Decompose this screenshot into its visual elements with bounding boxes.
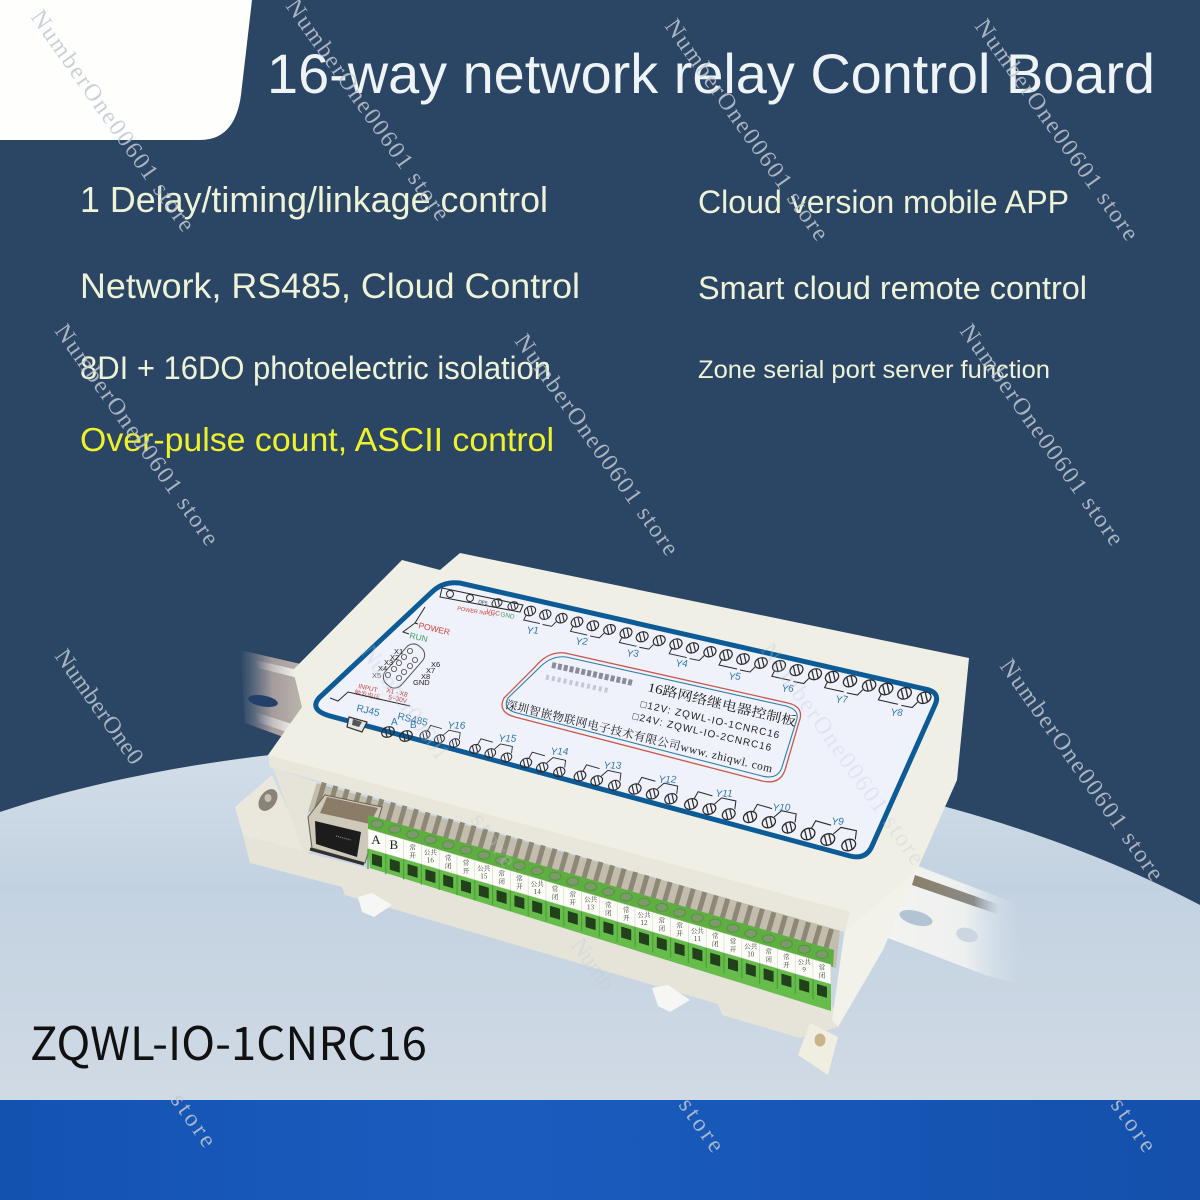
terminal column labels: 常 — [498, 868, 505, 878]
terminal column labels: 常 — [623, 905, 630, 914]
terminal column labels: 公共 — [531, 879, 544, 888]
db9 pin names — [372, 647, 440, 687]
terminal column A — [368, 820, 386, 869]
terminal column labels: 13 — [587, 903, 595, 912]
terminal column labels — [404, 830, 831, 999]
terminal column labels: 闭 — [659, 923, 666, 932]
db9 pin names: X6 — [431, 660, 440, 669]
top relay names: Y5 — [727, 671, 742, 683]
terminal column labels: 常 — [445, 853, 452, 862]
bottom relay names: Y13 — [602, 760, 623, 772]
run indicator label: RUN — [409, 630, 429, 644]
terminal column labels: 16 — [427, 856, 434, 865]
store watermarks: NumberOne00601 store — [25, 5, 199, 237]
terminal column labels: 闭 — [498, 876, 505, 886]
db9 pin names: X8 — [421, 672, 430, 681]
input trigger note: X1 - X8 — [386, 687, 409, 699]
model 24v line: □24V: ZQWL-IO-2CNRC16 — [631, 711, 773, 754]
device: din rail relay controller — [235, 553, 969, 1075]
terminal column labels: 闭 — [765, 955, 772, 964]
terminal column labels: 闭 — [552, 892, 559, 901]
power connector marking: DF5 — [478, 599, 488, 607]
db9 pin names: X5 — [372, 671, 381, 680]
terminal column labels: 10 — [747, 950, 755, 958]
bottom relay names: Y12 — [657, 774, 678, 786]
terminal column B — [386, 825, 404, 874]
gnd caption: GND — [500, 611, 515, 621]
lid front lip — [268, 755, 850, 932]
terminal column labels: 常 — [819, 962, 826, 971]
mounting screw — [255, 786, 281, 814]
terminal column labels: 公共 — [691, 926, 704, 935]
input trigger note: 触发电压 — [354, 687, 381, 702]
background: light curved floor — [0, 744, 1200, 1100]
input note bracket — [330, 692, 410, 706]
terminal column labels: 常 — [605, 900, 612, 909]
store watermarks: NumberOne00601 store — [954, 319, 1128, 551]
terminal column labels: 闭 — [819, 970, 826, 979]
terminal column labels: 9 — [802, 965, 806, 974]
terminal column labels: 11 — [694, 934, 701, 943]
terminal column labels: 常 — [765, 947, 772, 956]
bottom blue band — [0, 1100, 1200, 1200]
feature: serial port server: Zone serial port server function — [698, 356, 1050, 384]
feature: remote control: Smart cloud remote control — [698, 270, 1087, 306]
terminal column labels: 公共 — [744, 942, 758, 950]
terminal column labels: 开 — [730, 944, 737, 953]
terminal column B: B — [389, 837, 398, 852]
top relay names — [525, 625, 904, 719]
terminal column labels: 闭 — [605, 908, 612, 917]
terminal column labels: 12 — [640, 918, 648, 927]
terminal front face — [368, 848, 831, 1011]
terminal column labels: 公共 — [584, 895, 598, 904]
terminal column labels: 常 — [570, 889, 577, 898]
terminal column labels: 公共 — [477, 863, 491, 872]
feature: cloud app: Cloud version mobile APP — [698, 184, 1069, 220]
left mounting block — [235, 775, 308, 853]
store watermarks: NumberOne0 — [49, 644, 148, 770]
terminal column labels: 常 — [409, 842, 416, 851]
rj45 label: RJ45 — [355, 703, 381, 719]
ribbed cavity — [305, 780, 840, 968]
db9 pin names: X3 — [384, 658, 393, 667]
store watermarks: store — [165, 1088, 221, 1152]
store watermarks: NumberOne00601 store — [280, 0, 454, 226]
blurred logo text — [552, 665, 633, 683]
db9 pin names: X1 — [394, 647, 403, 656]
terminal top face — [368, 815, 834, 967]
db9 pin names: X2 — [390, 653, 399, 662]
rs485 screws — [380, 725, 414, 743]
terminal column labels: 公共 — [424, 848, 437, 857]
right side wall — [832, 868, 917, 1027]
top relay names: Y6 — [780, 683, 795, 695]
db9 input connector — [380, 640, 428, 692]
top relay names: Y1 — [525, 625, 540, 637]
terminal column labels: 公共 — [798, 957, 811, 966]
mounting ear with hole — [798, 1023, 838, 1075]
store watermarks: NumberOne00601 store — [509, 329, 683, 561]
terminal column labels: 常 — [712, 931, 719, 940]
terminal column labels: 开 — [783, 960, 790, 969]
a terminal label: A — [391, 717, 398, 728]
power indicator label: POWER — [418, 620, 451, 637]
indicator bracket — [403, 607, 425, 634]
model number: ZQWL-IO-1CNRC16 — [30, 1008, 427, 1074]
company and website line: 深圳智嵌物联网电子技术有限公司www. zhiqwl. com — [504, 697, 774, 775]
feature: delay timing linkage: 1 Delay/timing/linkage control — [80, 179, 548, 220]
din clip left — [358, 893, 392, 917]
bottom relay names: Y16 — [446, 720, 467, 732]
terminal column labels: 常 — [552, 884, 559, 893]
product name chinese: 16路网络继电器控制板 — [646, 679, 798, 729]
terminal column labels: 常 — [659, 915, 666, 924]
feature: pulse count highlighted: Over-pulse count, ASCII control — [80, 421, 554, 458]
terminal column labels: 常 — [463, 858, 470, 867]
terminal column labels: 开 — [676, 929, 683, 938]
bottom relay names: Y14 — [549, 746, 570, 758]
green terminal block — [368, 815, 834, 1011]
db9 pin names: X7 — [426, 666, 435, 675]
terminal column labels: 开 — [570, 897, 577, 906]
power connector marking — [440, 588, 523, 612]
feature: network rs485 cloud: Network, RS485, Cloud Control — [80, 267, 580, 306]
terminal column labels: 常 — [783, 952, 790, 961]
device lower front body — [243, 835, 838, 1038]
feature list: right column — [698, 184, 1087, 384]
bottom relay names: Y10 — [771, 802, 792, 814]
terminal column labels: 开 — [516, 882, 523, 891]
din clip right — [652, 985, 690, 1012]
top relay names: Y4 — [674, 658, 689, 670]
b terminal label: B — [410, 720, 417, 731]
terminal column labels: 14 — [534, 887, 541, 896]
input trigger note — [354, 683, 409, 705]
rj45 icon — [347, 717, 367, 732]
din rail: right behind device — [880, 865, 1020, 985]
model 12v line: □12V: ZQWL-IO-1CNRC16 — [639, 699, 781, 741]
terminal column labels: 公共 — [638, 910, 651, 919]
top relay terminals y1 to y8 — [523, 604, 933, 708]
top relay names: Y2 — [574, 636, 589, 648]
top-left white corner panel — [0, 0, 252, 140]
rs485 label: RS485 — [396, 711, 429, 729]
terminal column labels: 常 — [516, 874, 523, 883]
terminal column labels: 闭 — [445, 861, 452, 870]
top relay names: Y7 — [834, 694, 849, 706]
store watermarks: NumberOne00601 store — [755, 638, 929, 870]
feature: isolation: 8DI + 16DO photoelectric isolation — [80, 350, 551, 386]
input trigger note: 5~30V — [388, 694, 408, 705]
store watermarks: NumberOne00601 store — [969, 14, 1143, 246]
bottom relay names — [446, 720, 845, 828]
bottom relay names: Y15 — [497, 733, 518, 745]
bottom relay names: Y9 — [830, 816, 845, 828]
feature list: left column — [80, 179, 580, 458]
store watermarks: Numb — [565, 933, 620, 996]
blurred sub text — [546, 677, 610, 691]
terminal column labels: 15 — [480, 871, 488, 880]
db9 pin names: GND — [413, 678, 430, 687]
cavity left wall — [273, 768, 317, 852]
top relay names: Y3 — [625, 648, 640, 660]
terminal column labels: 开 — [409, 850, 416, 859]
terminal column A: A — [371, 832, 381, 847]
input trigger note: INPUT — [358, 683, 378, 694]
db9 pin names: X4 — [378, 664, 387, 673]
store watermarks: NumberOne00601 store — [49, 319, 223, 551]
bottom relay terminals y16 to y9 — [419, 725, 858, 853]
housing lid — [268, 553, 969, 932]
terminal column labels: 常 — [730, 936, 737, 945]
din rail: left behind device — [240, 650, 305, 745]
terminal column labels: 开 — [463, 866, 470, 875]
store watermarks: store — [465, 808, 521, 872]
store watermarks: NumberOne00601 store — [659, 14, 833, 246]
store watermarks: store — [673, 1093, 729, 1157]
terminal column labels: 常 — [676, 921, 683, 930]
terminal column labels: 开 — [623, 913, 630, 922]
vcc caption: VCC — [486, 608, 501, 618]
top relay names: Y8 — [889, 707, 904, 719]
store watermarks: Number00601 — [355, 640, 454, 766]
terminal column labels: 闭 — [712, 939, 719, 948]
title: 16-way network relay Control Board — [267, 42, 1155, 105]
bottom relay names: Y11 — [714, 788, 734, 800]
rj45 network jack — [308, 795, 382, 864]
product info box — [502, 653, 801, 782]
power input caption: POWER INPUT — [457, 606, 497, 619]
front label panel — [316, 583, 937, 857]
store watermarks: NumberOne00601 store — [994, 654, 1168, 886]
store watermarks: store — [1105, 1093, 1161, 1157]
